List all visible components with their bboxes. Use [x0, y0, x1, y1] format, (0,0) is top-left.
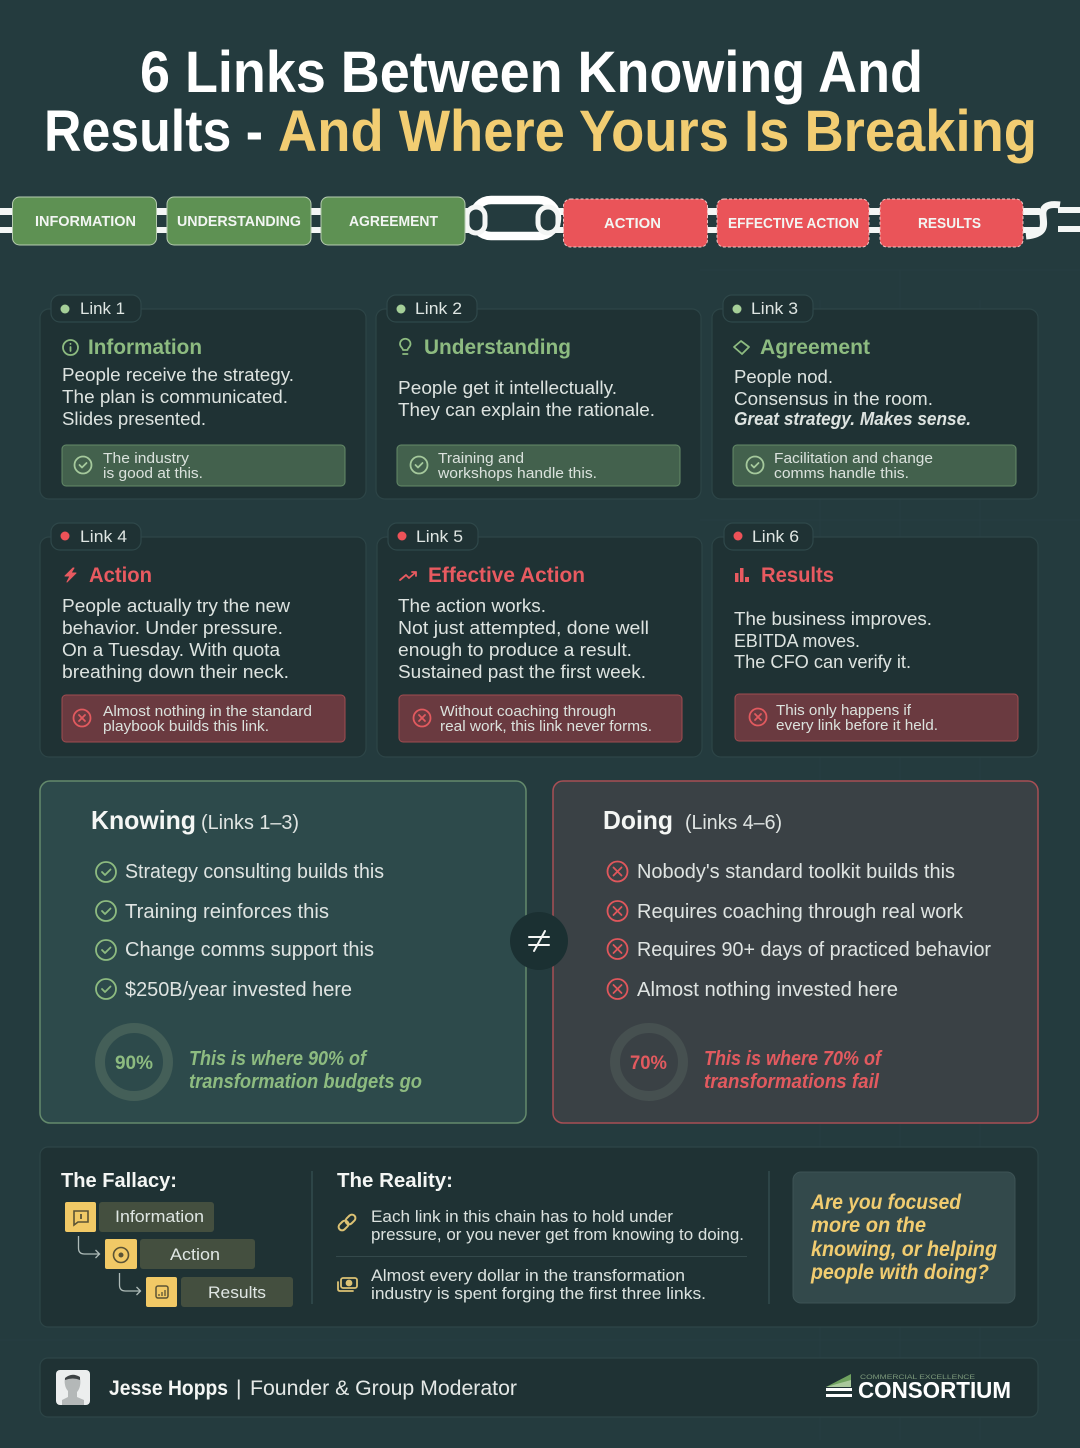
- chain node: understanding: UNDERSTANDING: [177, 214, 301, 230]
- callout: question: Are you focused: [810, 1191, 962, 1214]
- reality section: Almost every dollar in the transformation: [371, 1267, 685, 1285]
- callout: question: [793, 1172, 1015, 1303]
- chain node: effective action: [717, 199, 869, 247]
- checklist: doing: Nobody's standard toolkit builds this: [637, 861, 955, 883]
- checklist: knowing: Training reinforces this: [125, 901, 329, 923]
- checklist: doing: Requires 90+ days of practiced behavior: [637, 939, 991, 961]
- panel: link 6: [712, 523, 1038, 757]
- fallacy step: action: [105, 1239, 255, 1269]
- checklist: knowing: [96, 861, 384, 1001]
- panel: fallacy and reality: [40, 1147, 1038, 1327]
- callout: coaching: [399, 695, 682, 742]
- reality section: industry is spent forging the first three links.: [371, 1285, 706, 1303]
- callout: facilitation: [733, 445, 1016, 486]
- stat text: failures: This is where 70% of: [704, 1048, 883, 1070]
- callout: standard playbook: Almost nothing in the standard: [103, 703, 312, 720]
- stat text: failures: transformations fail: [704, 1071, 879, 1093]
- panel: link 3: Link 3: [751, 300, 798, 318]
- title: [44, 40, 1037, 164]
- panel: link 4: Action: [89, 564, 152, 587]
- callout: training: Training and: [438, 450, 524, 467]
- checklist: doing: Requires coaching through real work: [637, 901, 964, 923]
- panel: link 4: Link 4: [80, 528, 127, 546]
- title: 6 Links Between Knowing And: [140, 40, 923, 105]
- callout: industry strength: is good at this.: [103, 465, 203, 482]
- panel: link 1: The plan is communicated.: [62, 386, 288, 407]
- panel: knowing: [40, 781, 526, 1123]
- stat text: budgets: This is where 90% of: [189, 1048, 368, 1070]
- panel: link 5: The action works.: [398, 595, 546, 616]
- panel: knowing: (Links 1–3): [201, 812, 299, 834]
- panel: link 1: Information: [88, 336, 202, 359]
- donut: 90%: 90%: [115, 1053, 153, 1074]
- callout: question: people with doing?: [810, 1261, 989, 1284]
- panel: link 6: EBITDA moves.: [734, 630, 860, 651]
- chain diagram: [0, 197, 1080, 247]
- author name: Founder & Group Moderator: [250, 1377, 517, 1400]
- stat text: budgets: transformation budgets go: [189, 1071, 422, 1093]
- panel: link 6: Link 6: [752, 528, 799, 546]
- stat text: failures: [704, 1048, 883, 1093]
- panel: link 4: breathing down their neck.: [62, 661, 289, 682]
- panel: knowing: Knowing: [91, 805, 196, 835]
- chain node: information: [12, 197, 156, 245]
- chain node: action: [564, 199, 708, 247]
- icon: trend line: [400, 572, 416, 580]
- chain rails: [0, 207, 1080, 233]
- arrow: [78, 1236, 100, 1258]
- panel: link 1: Link 1: [80, 300, 125, 318]
- author name: Jesse Hopps: [109, 1377, 228, 1400]
- author name: |: [236, 1377, 241, 1400]
- panel: link 5: Sustained past the first week.: [398, 661, 646, 682]
- callout: industry strength: The industry: [103, 450, 190, 467]
- icon: bars: [735, 568, 749, 582]
- panel: link 4: behavior. Under pressure.: [62, 617, 283, 638]
- panel: link 4: People actually try the new: [62, 595, 291, 616]
- right chain link: [1026, 205, 1060, 236]
- panel: link 6: The CFO can verify it.: [734, 651, 911, 672]
- panel: link 2: [376, 295, 701, 499]
- panel: link 3: [712, 295, 1038, 499]
- reality section: The Reality:: [337, 1170, 453, 1192]
- panel: link 2: They can explain the rationale.: [398, 399, 655, 420]
- icon: money: [338, 1278, 357, 1291]
- panel: link 1: [40, 295, 366, 499]
- panel: link 5: Link 5: [416, 528, 463, 546]
- author name: [109, 1377, 517, 1400]
- icon: handshake: [734, 341, 749, 354]
- center chain link: [467, 200, 558, 236]
- panel: link 5: Not just attempted, done well: [398, 617, 649, 638]
- portrait: [56, 1370, 90, 1405]
- title: Results -: [44, 99, 263, 164]
- fallacy step: information: Information: [115, 1208, 204, 1226]
- panel: link 3: Great strategy. Makes sense.: [734, 408, 971, 429]
- chain node: results: RESULTS: [918, 216, 981, 232]
- checklist: knowing: Change comms support this: [125, 939, 374, 961]
- icon: lightning: [65, 568, 76, 582]
- panel: doing: Doing: [603, 805, 673, 835]
- panel: link 5: enough to produce a result.: [398, 639, 632, 660]
- callout: prior links: [735, 694, 1018, 741]
- callout: facilitation: Facilitation and change: [774, 450, 933, 467]
- fallacy step: information: [65, 1202, 214, 1232]
- panel: link 3: Consensus in the room.: [734, 388, 933, 409]
- checklist: doing: Almost nothing invested here: [637, 979, 898, 1001]
- callout: training: [397, 445, 680, 486]
- panel: link 4: [40, 523, 366, 757]
- icon: not equal badge: [510, 912, 568, 970]
- reality section: [336, 1170, 747, 1303]
- stat text: budgets: [189, 1048, 422, 1093]
- panel: link 4: On a Tuesday. With quota: [62, 639, 281, 660]
- callout: coaching: Without coaching through: [440, 703, 616, 720]
- callout: standard playbook: playbook builds this link.: [103, 718, 269, 735]
- title: And Where Yours Is Breaking: [278, 99, 1037, 164]
- callout: prior links: every link before it held.: [776, 717, 938, 734]
- panel: link 5: [377, 523, 702, 757]
- callout: industry strength: [62, 445, 345, 486]
- callout: standard playbook: [62, 695, 345, 742]
- donut: 90%: [100, 1028, 168, 1096]
- panel: link 2: Link 2: [415, 300, 462, 318]
- checklist: knowing: Strategy consulting builds this: [125, 861, 384, 883]
- panel: link 6: The business improves.: [734, 608, 932, 629]
- callout: prior links: This only happens if: [776, 702, 912, 719]
- chain node: information: INFORMATION: [35, 214, 136, 230]
- fallacy section: The Fallacy:: [61, 1170, 177, 1192]
- chain node: agreement: AGREEMENT: [349, 214, 438, 230]
- chain node: effective action: EFFECTIVE ACTION: [728, 216, 859, 232]
- panel: link 3: People nod.: [734, 366, 833, 387]
- icon: link: [337, 1213, 357, 1232]
- footer: [40, 1358, 1038, 1417]
- callout: question: more on the: [811, 1214, 926, 1237]
- logo: consortium: COMMERCIAL EXCELLENCE: [860, 1375, 975, 1381]
- panel: link 5: Effective Action: [428, 564, 585, 587]
- icon: info: [63, 340, 78, 355]
- logo: consortium: CONSORTIUM: [858, 1377, 1011, 1403]
- callout: facilitation: comms handle this.: [774, 465, 909, 482]
- panel: doing: (Links 4–6): [685, 812, 782, 834]
- icon: lightbulb: [400, 339, 410, 354]
- chain node: agreement: [321, 197, 465, 245]
- panel: link 1: Slides presented.: [62, 408, 206, 429]
- checklist: doing: [608, 861, 991, 1001]
- arrow: [120, 1273, 140, 1295]
- reality section: pressure, or you never get from knowing to doing.: [371, 1226, 744, 1244]
- fallacy step: action: Action: [170, 1246, 220, 1264]
- chain node: results: [880, 199, 1023, 247]
- fallacy step: results: Results: [208, 1284, 266, 1302]
- checklist: knowing: $250B/year invested here: [125, 979, 352, 1001]
- fallacy step: results: [146, 1277, 293, 1307]
- chain node: action: ACTION: [604, 216, 661, 232]
- fallacy section: [61, 1170, 293, 1307]
- panel: link 3: Agreement: [760, 336, 870, 359]
- callout: training: workshops handle this.: [437, 465, 597, 482]
- panel: link 6: Results: [761, 564, 834, 587]
- panel: link 2: People get it intellectually.: [398, 377, 617, 398]
- panel: doing: [553, 781, 1038, 1123]
- callout: question: knowing, or helping: [811, 1238, 997, 1261]
- callout: coaching: real work, this link never forms.: [440, 718, 652, 735]
- reality section: Each link in this chain has to hold under: [371, 1208, 674, 1226]
- panel: link 2: Understanding: [424, 336, 571, 359]
- chain node: understanding: [167, 197, 311, 245]
- panel: link 1: People receive the strategy.: [62, 364, 294, 385]
- donut: 70%: 70%: [630, 1053, 667, 1074]
- donut: 70%: [615, 1028, 683, 1096]
